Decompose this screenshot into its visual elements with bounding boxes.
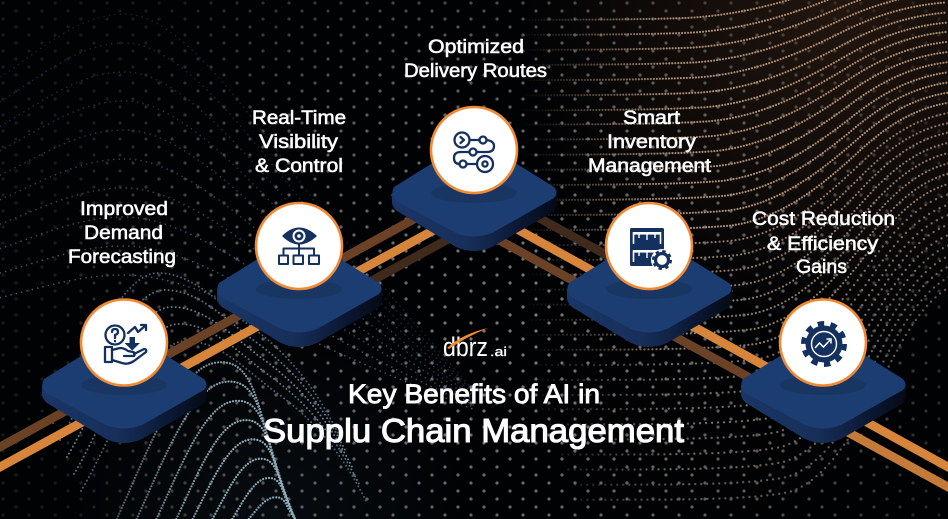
label: improved demand forecasting: Improved <box>80 199 168 220</box>
platform 1: demand forecasting <box>42 334 207 443</box>
icon: demand forecasting badge <box>81 300 167 386</box>
label: improved demand forecasting: Forecasting <box>68 247 176 268</box>
icon: inventory badge <box>606 203 692 289</box>
orange connecting tracks <box>0 208 948 492</box>
label: real-time visibility and control: & Control <box>255 156 343 177</box>
platform 3: delivery routes <box>392 142 557 251</box>
platform 4: inventory <box>567 238 732 347</box>
label: optimized delivery routes: Optimized <box>428 37 524 58</box>
label: cost reduction and efficiency gains: Cost Reduction <box>752 209 895 230</box>
icon: visibility badge <box>256 203 342 289</box>
title: Supplu Chain Management <box>263 412 684 449</box>
label: optimized delivery routes: Delivery Routes <box>404 61 547 82</box>
label: real-time visibility and control: Visibility <box>259 132 339 153</box>
label: cost reduction and efficiency gains: & Efficiency <box>767 234 879 255</box>
icon: route optimization badge <box>431 107 517 193</box>
title <box>263 379 684 449</box>
logo: dbrz.ai: .ai <box>490 344 507 359</box>
title: Key Benefits of AI in <box>348 379 600 409</box>
label: real-time visibility and control: Real-Time <box>252 108 346 129</box>
label: improved demand forecasting: Demand <box>84 223 163 244</box>
logo: dbrz.ai: dbrz <box>443 332 488 362</box>
label: smart inventory management: Smart <box>623 108 681 129</box>
label: cost reduction and efficiency gains <box>752 209 895 278</box>
label: smart inventory management: Inventory <box>607 132 697 153</box>
label: cost reduction and efficiency gains: Gains <box>796 257 847 278</box>
platform 5: cost reduction <box>741 334 906 443</box>
label: optimized delivery routes <box>404 37 547 82</box>
label: smart inventory management: Management <box>588 156 712 177</box>
label: improved demand forecasting <box>68 199 176 268</box>
label: real-time visibility and control <box>252 108 346 177</box>
icon: cost efficiency gear badge <box>780 300 866 386</box>
platform 2: visibility <box>217 238 382 347</box>
label: smart inventory management <box>588 108 712 177</box>
